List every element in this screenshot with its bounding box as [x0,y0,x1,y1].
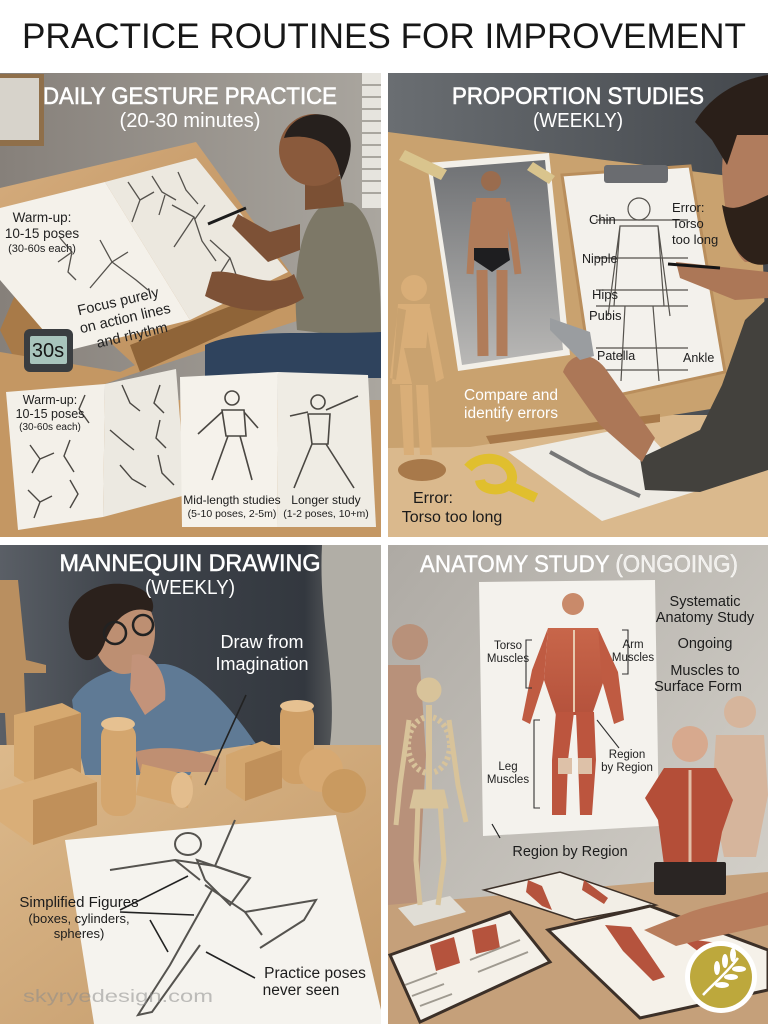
annotation: simplified [19,894,139,941]
diagram labels: Nipple [582,252,617,266]
anatomy poster [479,580,659,836]
diagram labels: too long [672,232,718,247]
curtain [321,545,381,745]
annotation: simplified: Simplified Figures [19,894,139,911]
text on book: focus: Focus purely [76,285,161,319]
timer: 30s [24,329,73,372]
blurred statue right [712,696,768,857]
annotation: imagination: Imagination [215,654,309,674]
poster labels [487,639,654,786]
mannequin [390,275,446,481]
diagram labels: Torso [672,216,704,231]
table [388,415,768,537]
annotation: systematic: Anatomy Study [656,610,755,626]
annotation: practice poses: never seen [263,982,339,999]
text on book: warm-up: (30-60s each) [8,243,76,255]
labels: studies: Longer study [291,493,361,507]
spheres [299,748,366,813]
caption: compare: Compare and [464,387,558,404]
panel: mannequin drawing [0,545,381,1024]
annotation: practice poses: Practice poses [264,965,366,982]
text on book: focus [74,283,176,355]
watermark: skyryedesign.com [23,986,213,1006]
annotation: systematic: Ongoing [678,636,732,652]
title: PRACTICE ROUTINES FOR IMPROVEMENT [22,16,746,56]
panel: daily gesture practice [0,73,381,537]
poster labels: Muscles [487,774,529,786]
blurred statue left [388,624,428,905]
text on book: warm-up [5,210,79,255]
labels: studies: Mid-length studies [183,493,281,507]
timer: 30s: 30s [32,340,64,362]
panel heading: gesture: DAILY GESTURE PRACTICE [43,83,337,110]
text on book: warm-up: Warm-up: [13,210,71,225]
labels: studies [183,493,369,520]
poster lines [526,630,628,808]
caption: error: Torso too long [402,509,502,526]
pointer lines [120,695,255,978]
muscle figure [522,593,624,815]
panel: proportion studies [388,73,768,537]
text on book: focus: on action lines [78,301,172,337]
caption: compare: identify errors [464,405,558,422]
small book [484,872,656,920]
panel heading: proportion: (WEEKLY) [533,110,623,132]
window blinds [362,73,381,208]
poster labels: by Region [601,762,653,774]
annotation: systematic [654,594,755,695]
panel heading: proportion [452,83,704,132]
diagram labels [582,200,718,365]
text on book: warm-up: 10-15 poses [5,226,79,241]
panel heading: mannequin: MANNEQUIN DRAWING [60,550,320,577]
panel heading: mannequin: (WEEKLY) [145,577,235,599]
panel heading: anatomy: ANATOMY STUDY (ONGOING) [420,551,738,578]
caption: error [402,490,502,526]
woman [69,584,256,775]
annotation: simplified: spheres) [54,926,104,941]
panel heading: proportion: PROPORTION STUDIES [452,83,704,110]
title band [0,0,768,73]
table [388,872,768,1024]
annotation: practice poses [263,965,366,999]
annotation: simplified: (boxes, cylinders, [28,911,130,926]
diagram labels: Error: [672,200,704,215]
large book left [390,912,550,1022]
drawing easel board [0,142,300,370]
open sketchbook on easel [0,158,288,355]
annotation: imagination: Draw from [220,632,304,652]
lower right sketchbook [180,372,376,527]
labels: studies: (5-10 poses, 2-5m) [188,508,276,520]
panel: anatomy study [388,545,768,1024]
artist with beard [550,75,768,492]
table [0,290,381,537]
labels: studies: (1-2 poses, 10+m) [283,508,369,520]
cube stack [0,703,97,845]
diagram labels: Ankle [683,351,714,365]
poster labels: Torso [494,640,522,652]
corkboard [388,132,768,448]
annotation: systematic: Systematic [670,594,740,610]
annotation: systematic: Muscles to [670,663,740,679]
clipboard diagram [562,165,725,400]
diagram labels: Hips [592,287,619,302]
wall frame [0,74,44,146]
caption: error: Error: [413,490,453,507]
panel heading: mannequin [60,550,320,599]
figures [28,385,174,518]
diagram labels: Pubis [589,308,622,323]
large book right [548,906,768,1018]
book text: 10-15 poses [16,407,84,421]
ruler [486,414,660,444]
annotation: imagination [215,632,309,674]
artist [205,114,381,378]
cylinders [101,700,314,816]
diagram labels: Chin [589,212,616,227]
masking tape [399,150,555,184]
poster labels: Leg [498,761,518,773]
poster labels: Region [609,749,645,761]
reference photo [427,153,570,371]
annotation: region: Region by Region [512,844,628,860]
hand pointing [644,892,768,946]
book text: (30-60s each) [19,422,81,433]
panel heading: gesture [43,83,337,132]
gesture sketches [58,172,238,290]
text on book: focus: and rhythm [95,320,169,352]
cube right [226,741,282,801]
panel heading: gesture: (20-30 minutes) [120,110,260,132]
paper on table [508,425,700,521]
wooden solids [0,700,366,845]
poster labels: Muscles [487,653,529,665]
annotation: systematic: Surface Form [654,679,742,695]
skeleton [396,678,466,926]
table [0,745,381,1024]
caption: compare [464,387,558,422]
book text: Warm-up: [23,393,77,407]
muscle bust [645,726,733,895]
paper sheet [65,815,381,1024]
poster labels: Arm [622,639,644,651]
wood mannequin [0,580,46,773]
book text [16,393,84,433]
measuring tape [468,459,536,498]
figure drawing [110,820,316,1015]
badge icon: wheat [685,941,757,1013]
poster labels: Muscles [612,652,654,664]
lower left sketchbook [6,369,186,530]
books [390,872,768,1022]
diagram labels: Patella [597,349,635,363]
